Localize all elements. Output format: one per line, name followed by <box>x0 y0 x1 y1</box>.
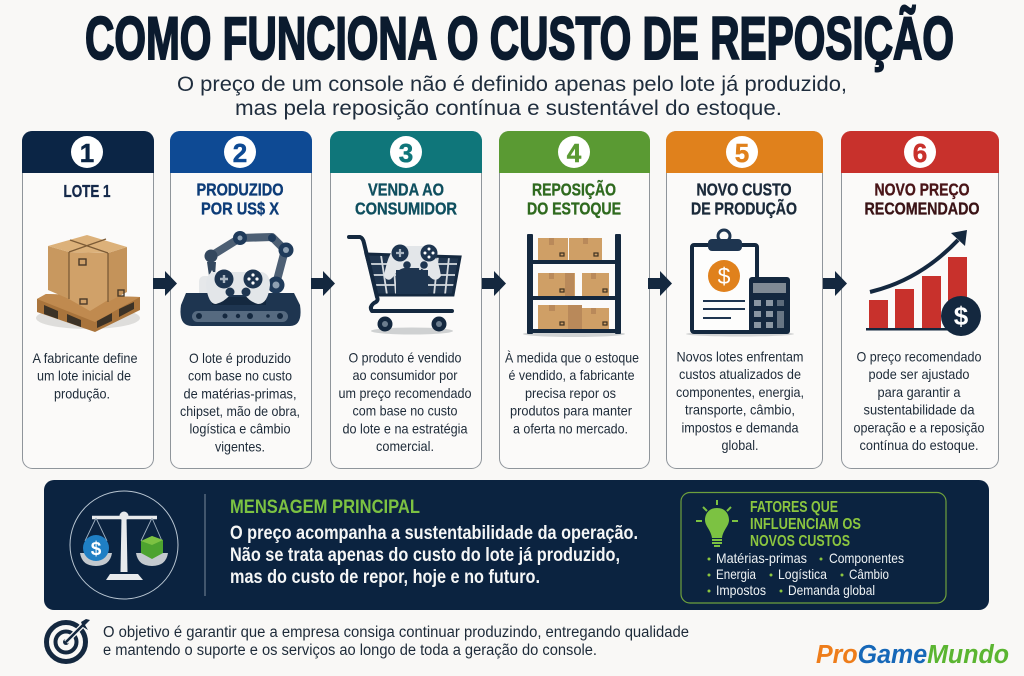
factors list: Demanda global <box>788 582 875 598</box>
step 3 text: comercial. <box>376 438 434 454</box>
main message text: Não se trata apenas do custo do lote já produzido, <box>230 544 620 566</box>
step 6 text: contínua do estoque. <box>860 437 978 453</box>
step 4 text: é vendido, a fabricante <box>508 367 635 383</box>
number badge 2 <box>224 136 256 168</box>
icon: balance scale: $ <box>91 539 102 560</box>
step 3 text <box>338 350 472 454</box>
step 2 text: vigentes. <box>215 438 265 454</box>
subtitle: mas pela reposição contínua e sustentável do estoque. <box>235 96 782 120</box>
icon: clipboard and calculator: $ <box>718 263 731 289</box>
logo: ProGameMundo: ProGameMundo <box>816 641 1009 669</box>
subtitle: O preço de um console não é definido apenas pelo lote já produzido, <box>177 72 847 96</box>
panel: step 4 reposição <box>499 131 650 468</box>
factors list: Câmbio <box>849 566 889 582</box>
number badge 3 <box>390 136 422 168</box>
panel: main message <box>44 480 989 610</box>
step 1 text: produção. <box>54 385 110 401</box>
header band 4 <box>499 131 650 173</box>
number badge 2: 2 <box>233 138 247 168</box>
step 2 text: com base no custo <box>188 368 292 384</box>
header band 5 <box>666 131 823 173</box>
icon: stock shelf with boxes <box>523 234 625 337</box>
main message text <box>230 522 638 588</box>
step 6 text: pode ser ajustado <box>868 366 970 382</box>
factors heading <box>750 499 861 550</box>
arrow 1 to 2 <box>153 271 177 296</box>
step 3 text: ao consumidor por <box>352 367 458 383</box>
step 4 text: a oferta no mercado. <box>513 420 628 436</box>
panel: cost factors <box>681 492 946 603</box>
arrow 4 to 5 <box>648 271 672 296</box>
step 4 text: precisa repor os <box>525 385 616 401</box>
step 5 text: Novos lotes enfrentam <box>676 348 804 364</box>
factors list: Energia <box>716 566 756 582</box>
step 6 heading: NOVO PREÇO <box>874 180 970 200</box>
panel: step 2 produzido <box>170 131 312 468</box>
step 1 text: um lote inicial de <box>37 368 131 384</box>
header band 3 <box>330 131 482 173</box>
step 5 text: componentes, energia, <box>676 384 804 400</box>
number badge 5: 5 <box>735 138 749 168</box>
main message text: mas do custo de repor, hoje e no futuro. <box>230 566 540 588</box>
step 6 text: para garantir a <box>878 384 961 400</box>
panel: step 1 lote 1 <box>22 131 154 468</box>
factors list <box>708 550 904 598</box>
step 4 text: À medida que o estoque <box>505 350 639 366</box>
header band 2 <box>170 131 312 173</box>
number badge 4 <box>558 136 590 168</box>
step 4 heading: DO ESTOQUE <box>527 198 621 218</box>
step 1 heading: LOTE 1 <box>64 181 111 201</box>
step 3 text: um preço recomendado <box>338 385 472 401</box>
step 6 heading <box>864 180 980 218</box>
number badge 5 <box>726 136 758 168</box>
footer text <box>103 624 689 659</box>
factors heading: NOVOS CUSTOS <box>750 533 850 550</box>
step 5 heading: NOVO CUSTO <box>696 180 792 200</box>
factors list: Matérias-primas <box>716 550 807 566</box>
icon: target with arrow <box>46 619 90 662</box>
subtitle <box>177 72 847 120</box>
step 2 text: de matérias-primas, <box>184 385 296 401</box>
step 2 text: chipset, mão de obra, <box>180 403 300 419</box>
step 6 text: operação e a reposição <box>854 419 985 435</box>
icon: rising bar chart with coin <box>866 230 981 336</box>
step 5 text <box>676 348 804 453</box>
icon: clipboard and calculator <box>686 230 794 336</box>
step 5 text: impostos e demanda <box>682 419 799 435</box>
step 5 heading: DE PRODUÇÃO <box>691 198 797 218</box>
step 5 text: transporte, câmbio, <box>685 402 795 418</box>
step 4 text: produtos para manter <box>510 403 632 419</box>
factors list: Impostos <box>716 582 766 598</box>
icon: rising bar chart with coin: $ <box>954 301 969 331</box>
step 6 text: sustentabilidade da <box>864 402 975 418</box>
heading: mensagem principal: MENSAGEM PRINCIPAL <box>230 496 420 518</box>
step 2 heading: POR US$ X <box>201 198 279 218</box>
arrow 2 to 3 <box>311 271 335 296</box>
number badge 3: 3 <box>399 138 413 168</box>
step 5 text: custos atualizados de <box>679 366 801 382</box>
number badge 1: 1 <box>80 138 94 168</box>
step 2 text: logística e câmbio <box>190 421 291 437</box>
icon: shopping cart with controller <box>349 237 460 334</box>
panel: step 3 venda <box>330 131 482 468</box>
icon: light bulb <box>696 500 738 546</box>
step 6 text: O preço recomendado <box>856 348 982 364</box>
factors heading: FATORES QUE <box>750 499 838 516</box>
step 1 text: A fabricante define <box>32 350 138 366</box>
step 6 text <box>854 348 985 453</box>
footer text: O objetivo é garantir que a empresa consiga continuar produzindo, entregando qualidade <box>103 624 689 641</box>
factors list: Componentes <box>829 550 904 566</box>
footer text: e mantendo o suporte e os serviços ao longo de toda a geração do console. <box>103 642 597 659</box>
factors list: Logística <box>778 566 827 582</box>
arrow 5 to 6 <box>823 271 847 296</box>
step 3 heading <box>355 180 457 218</box>
step 2 text: O lote é produzido <box>189 350 291 366</box>
step 5 text: global. <box>722 437 758 453</box>
main message text: O preço acompanha a sustentabilidade da operação. <box>230 522 638 544</box>
step 2 heading <box>196 180 284 218</box>
icon: boxes on pallet <box>36 235 140 332</box>
number badge 6: 6 <box>913 138 927 168</box>
panel: step 5 novo custo <box>666 131 823 468</box>
icon: robot arm and controller on conveyor <box>180 231 301 326</box>
step 3 text: O produto é vendido <box>348 350 462 366</box>
number badge 1 <box>71 136 103 168</box>
step 4 text <box>505 350 639 436</box>
panel: step 6 novo preço <box>841 131 999 468</box>
arrow 3 to 4 <box>482 271 506 296</box>
step 5 heading <box>691 180 797 218</box>
header band 6 <box>841 131 999 173</box>
step 3 text: com base no custo <box>352 403 458 419</box>
step 6 heading: RECOMENDADO <box>864 198 980 218</box>
number badge 6 <box>904 136 936 168</box>
step 2 heading: PRODUZIDO <box>196 180 284 200</box>
step 2 text <box>180 350 300 454</box>
step 3 heading: VENDA AO <box>368 180 444 200</box>
step 1 text <box>32 350 138 401</box>
step 3 text: do lote e na estratégia <box>342 420 468 436</box>
step 4 heading <box>527 178 621 218</box>
step 4 heading: REPOSIÇÃO <box>532 178 616 200</box>
icon: balance scale <box>70 491 178 599</box>
factors heading: INFLUENCIAM OS <box>750 516 861 533</box>
number badge 4: 4 <box>567 138 582 168</box>
step 3 heading: CONSUMIDOR <box>355 198 457 218</box>
header band 1 <box>22 131 154 173</box>
